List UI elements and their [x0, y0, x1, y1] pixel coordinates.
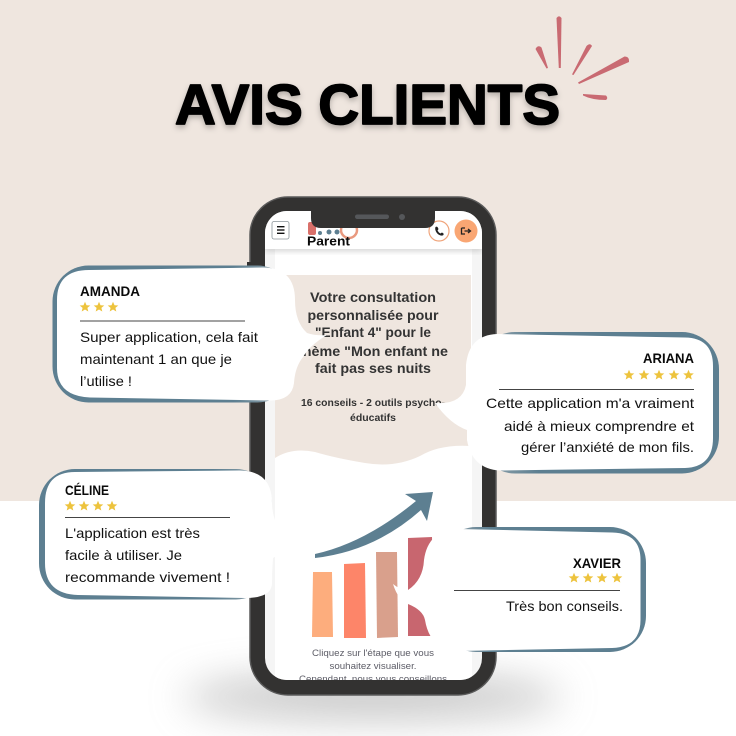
- menu button: [272, 222, 289, 239]
- bubble body: [435, 334, 713, 470]
- bubble body: [57, 268, 327, 400]
- bubble border: [39, 469, 272, 600]
- call button: [429, 221, 449, 241]
- review bubble: Amanda: [52, 266, 327, 402]
- app header: [265, 211, 482, 249]
- star rating: 5 stars: [624, 370, 694, 380]
- growth chart: arrow: [315, 492, 433, 558]
- name: XAVIER: [573, 555, 621, 571]
- consultation heading: [298, 289, 448, 376]
- logout button: [454, 220, 478, 242]
- bubble border: [478, 332, 719, 474]
- review text: maintenant 1 an que je: [80, 351, 232, 367]
- consultation details: éducatifs: [350, 413, 396, 424]
- instructions text: Cependant, nous vous conseillons: [299, 674, 447, 685]
- name: ARIANA: [643, 350, 694, 366]
- consultation panel: [275, 275, 471, 464]
- review text: Très bon conseils.: [506, 598, 623, 614]
- divider: [454, 590, 620, 591]
- review text: l’utilise !: [80, 373, 132, 389]
- consultation heading: thème "Mon enfant ne: [298, 343, 448, 359]
- phone: [247, 197, 496, 695]
- divider: [80, 320, 245, 322]
- review bubble: Céline: [39, 469, 303, 600]
- consultation details: [302, 398, 444, 421]
- review bubble: Xavier: [393, 527, 646, 652]
- consultation heading: personnalisée pour: [308, 307, 439, 323]
- divider: [499, 389, 694, 390]
- consultation heading: Votre consultation: [310, 289, 436, 305]
- bubble body: [393, 529, 640, 651]
- review text: [486, 395, 694, 455]
- name: CÉLINE: [65, 482, 109, 498]
- instructions text: [300, 650, 446, 680]
- consultation details: 16 conseils - 2 outils psycho-: [301, 398, 445, 409]
- bubble body: [45, 470, 303, 598]
- review text: gérer l’anxiété de mon fils.: [521, 439, 694, 455]
- consultation heading: "Enfant 4" pour le: [315, 324, 431, 340]
- instructions text: souhaitez visualiser.: [330, 661, 416, 672]
- growth chart: bars: [312, 537, 434, 638]
- review text: L'application est très: [65, 525, 200, 541]
- review bubble: Ariana: [435, 332, 719, 474]
- name: AMANDA: [80, 283, 140, 299]
- review text: aidé à mieux comprendre et: [504, 418, 694, 434]
- app logo: Parent: [307, 234, 351, 248]
- title: AVIS CLIENTS: [175, 73, 560, 137]
- review text: facile à utiliser. Je: [65, 547, 182, 563]
- star rating: 4 stars: [569, 573, 622, 582]
- review text: recommande vivement !: [65, 569, 230, 585]
- phone screen: [265, 211, 482, 685]
- review text: Super application, cela fait: [80, 329, 258, 345]
- bubble border: [440, 527, 646, 652]
- review text: Cette application m'a vraiment: [486, 395, 694, 411]
- review text: [80, 329, 258, 389]
- phone notch: [311, 209, 435, 228]
- consultation heading: fait pas ses nuits: [315, 360, 431, 376]
- app logo: [307, 222, 357, 248]
- phone frame: [250, 197, 496, 695]
- background: beige upper band: [0, 0, 736, 501]
- divider: [65, 517, 230, 518]
- star rating: 3 stars: [80, 302, 118, 312]
- icon: sparkle strokes: [536, 16, 629, 100]
- app header shadow: [265, 249, 482, 254]
- bubble border: [52, 266, 294, 402]
- instructions text: Cliquez sur l'étape que vous: [312, 648, 434, 659]
- star rating: 4 stars: [65, 501, 117, 510]
- phone side button: [247, 262, 251, 278]
- phone shadow: [183, 675, 563, 719]
- review text: [65, 525, 230, 585]
